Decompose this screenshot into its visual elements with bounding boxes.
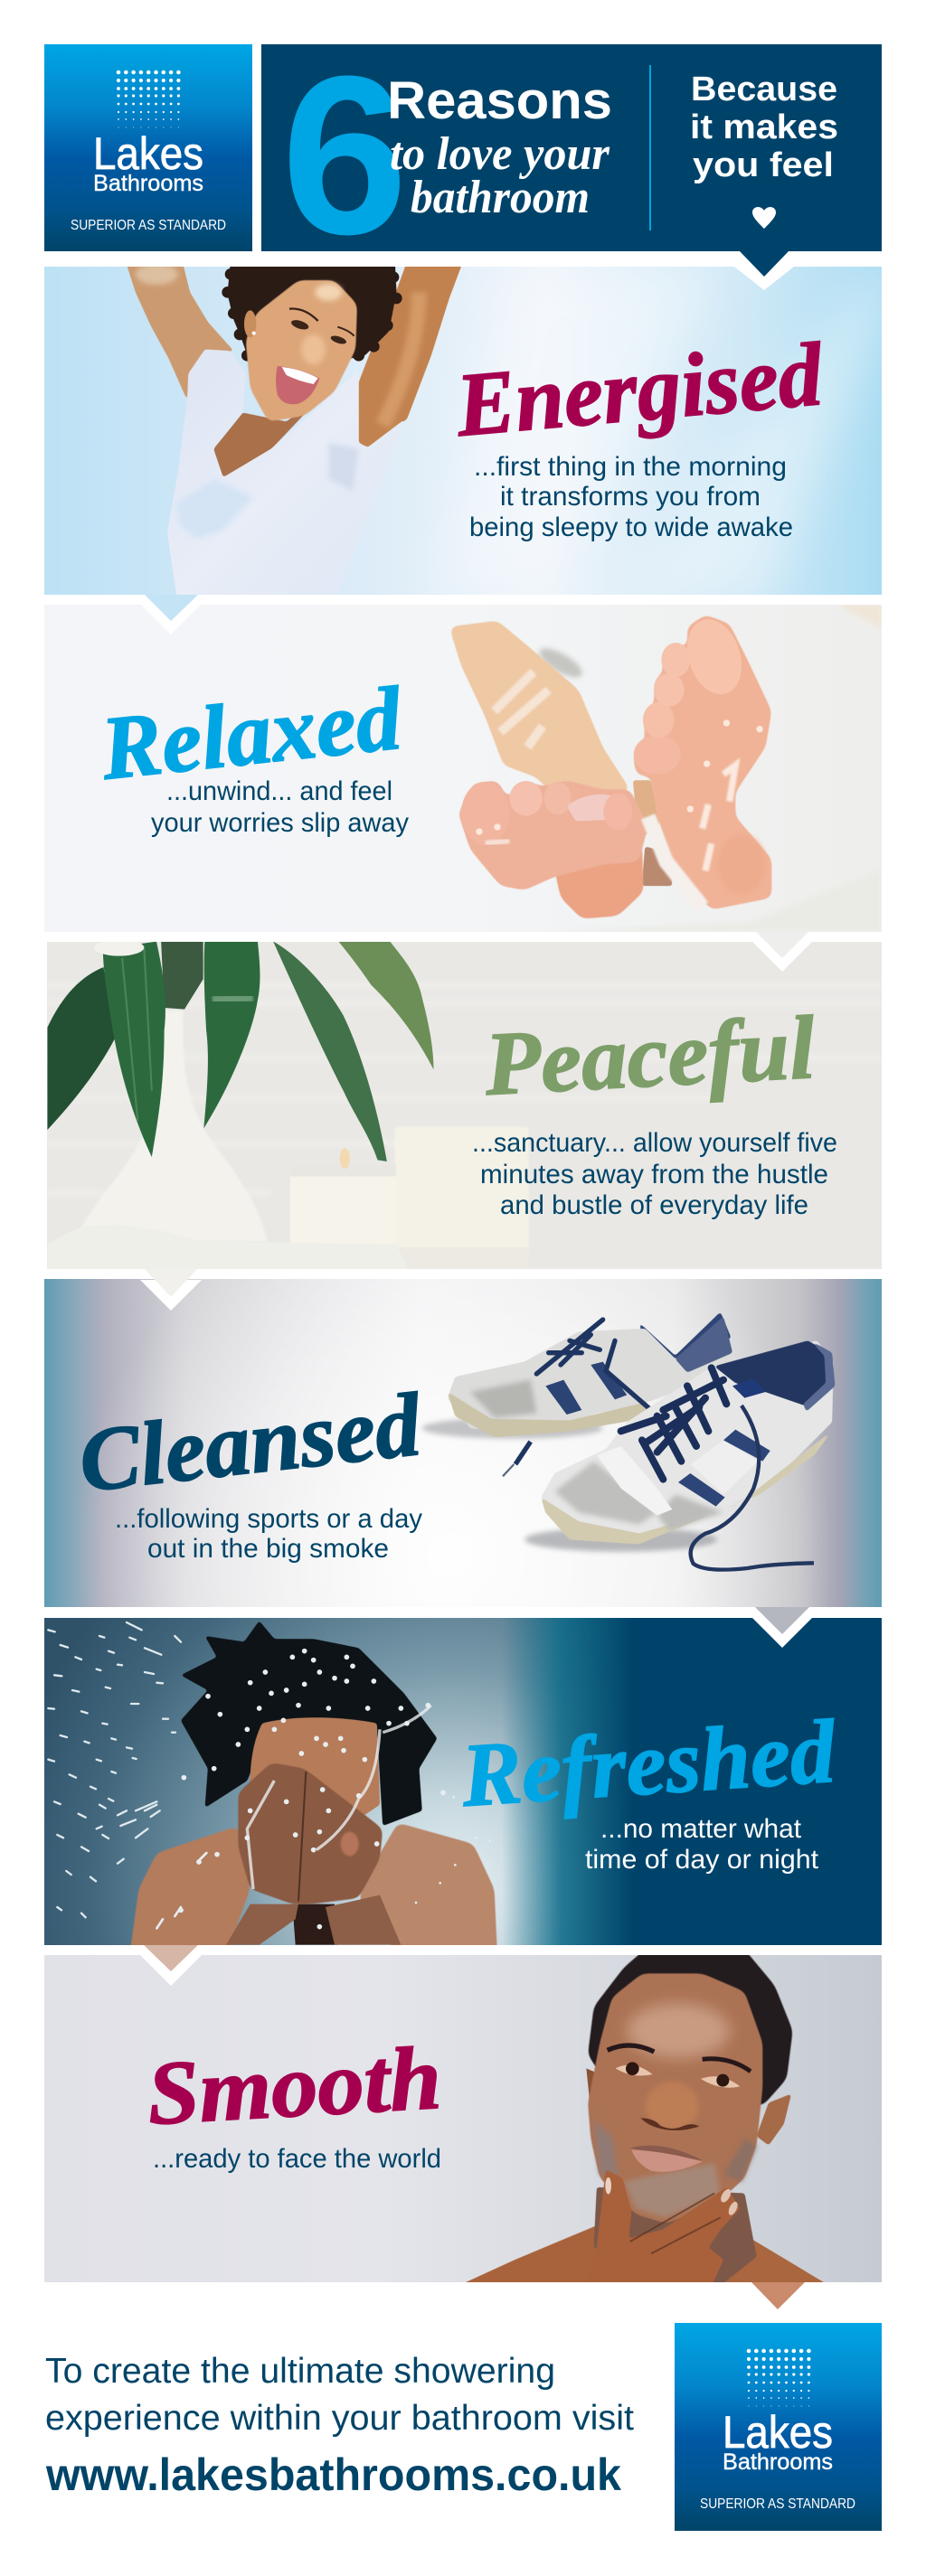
caption: ...first thing in the morning — [474, 452, 787, 482]
caption — [585, 1814, 819, 1875]
logo wordmark — [71, 128, 226, 233]
caption — [472, 1128, 837, 1220]
logo wordmark — [700, 2407, 855, 2512]
panel: Relaxed — [44, 605, 882, 932]
caption: ...sanctuary... allow yourself five — [472, 1128, 837, 1158]
panel: Cleansed — [44, 1279, 882, 1607]
photo: cheering woman — [126, 262, 904, 603]
caption — [115, 1504, 422, 1564]
caption: ...no matter what — [600, 1814, 802, 1844]
arrow: Refreshed pointer — [140, 1945, 202, 1986]
panel: Refreshed — [44, 1618, 882, 1955]
call to action text: experience within your bathroom visit — [45, 2399, 634, 2438]
arrow: Cleansed pointer — [752, 1607, 812, 1648]
title: Smooth: Smooth — [145, 2027, 444, 2144]
tagline: Because it makes you feel: it makes — [690, 108, 838, 146]
logo: Lakes Bathrooms header — [44, 44, 252, 251]
tagline: Because it makes you feel: Because — [691, 71, 837, 108]
caption: ...ready to face the world — [153, 2144, 441, 2174]
footer: call to action — [45, 2352, 634, 2500]
caption: minutes away from the hustle — [480, 1160, 828, 1189]
caption: your worries slip away — [151, 808, 409, 838]
logo wordmark: Bathrooms — [93, 171, 203, 196]
arrow: Energised pointer — [141, 595, 201, 635]
logo wordmark: SUPERIOR AS STANDARD — [700, 2496, 855, 2512]
icon: heart — [752, 207, 776, 229]
photo: man splashing water — [48, 1621, 497, 1955]
title: Refreshed: Refreshed — [458, 1701, 840, 1826]
call to action text: To create the ultimate showering — [45, 2352, 555, 2391]
panel: Peaceful — [47, 939, 882, 1270]
photo: plant, vase and candles — [47, 942, 528, 1247]
logo: Lakes Bathrooms footer — [675, 2323, 882, 2531]
divider line — [649, 65, 651, 230]
caption: it transforms you from — [500, 482, 761, 512]
tagline: Because it makes you feel — [690, 71, 838, 184]
logo wordmark: SUPERIOR AS STANDARD — [71, 218, 226, 233]
tagline: Because it makes you feel: you feel — [693, 146, 834, 184]
title: Energised: Energised — [451, 324, 827, 456]
title: Reasons to love your bathroom: bathroom — [411, 172, 590, 223]
caption: being sleepy to wide awake — [469, 512, 793, 542]
big number 6: 6 — [281, 29, 408, 281]
title: Cleansed: Cleansed — [74, 1374, 427, 1511]
logo wordmark: Lakes — [723, 2407, 833, 2458]
logo wordmark: Lakes — [93, 128, 203, 179]
photo: worn trainers — [422, 1312, 835, 1570]
call to action text — [45, 2352, 634, 2500]
caption: and bustle of everyday life — [500, 1190, 808, 1220]
photo: man touching his chin — [465, 1955, 824, 2295]
logo wordmark: Bathrooms — [723, 2449, 833, 2475]
caption: ...unwind... and feel — [166, 776, 392, 806]
arrow: Relaxed pointer — [752, 932, 812, 972]
title: Peaceful: Peaceful — [481, 997, 817, 1114]
panel: Energised — [44, 262, 904, 603]
caption — [151, 776, 409, 838]
logo dot grid — [749, 2351, 809, 2406]
caption: time of day or night — [585, 1845, 819, 1875]
arrow: header pointer — [733, 251, 795, 290]
arrow: Peaceful pointer — [140, 1269, 202, 1311]
photo: feet in bath foam — [449, 605, 882, 932]
panel: Smooth — [44, 1950, 882, 2293]
title: Reasons to love your bathroom: Reasons — [387, 71, 612, 130]
call to action text: www.lakesbathrooms.co.uk — [45, 2449, 621, 2500]
title: Reasons to love your bathroom: to love your — [390, 128, 610, 180]
caption — [469, 452, 793, 542]
caption: out in the big smoke — [147, 1534, 389, 1564]
title: Relaxed: Relaxed — [96, 668, 407, 799]
arrow: Smooth pointer — [751, 2282, 805, 2309]
logo dot grid — [118, 72, 179, 127]
caption: ...following sports or a day — [115, 1504, 422, 1534]
title: Reasons to love your bathroom — [387, 71, 612, 223]
panel: title banner — [261, 29, 882, 281]
